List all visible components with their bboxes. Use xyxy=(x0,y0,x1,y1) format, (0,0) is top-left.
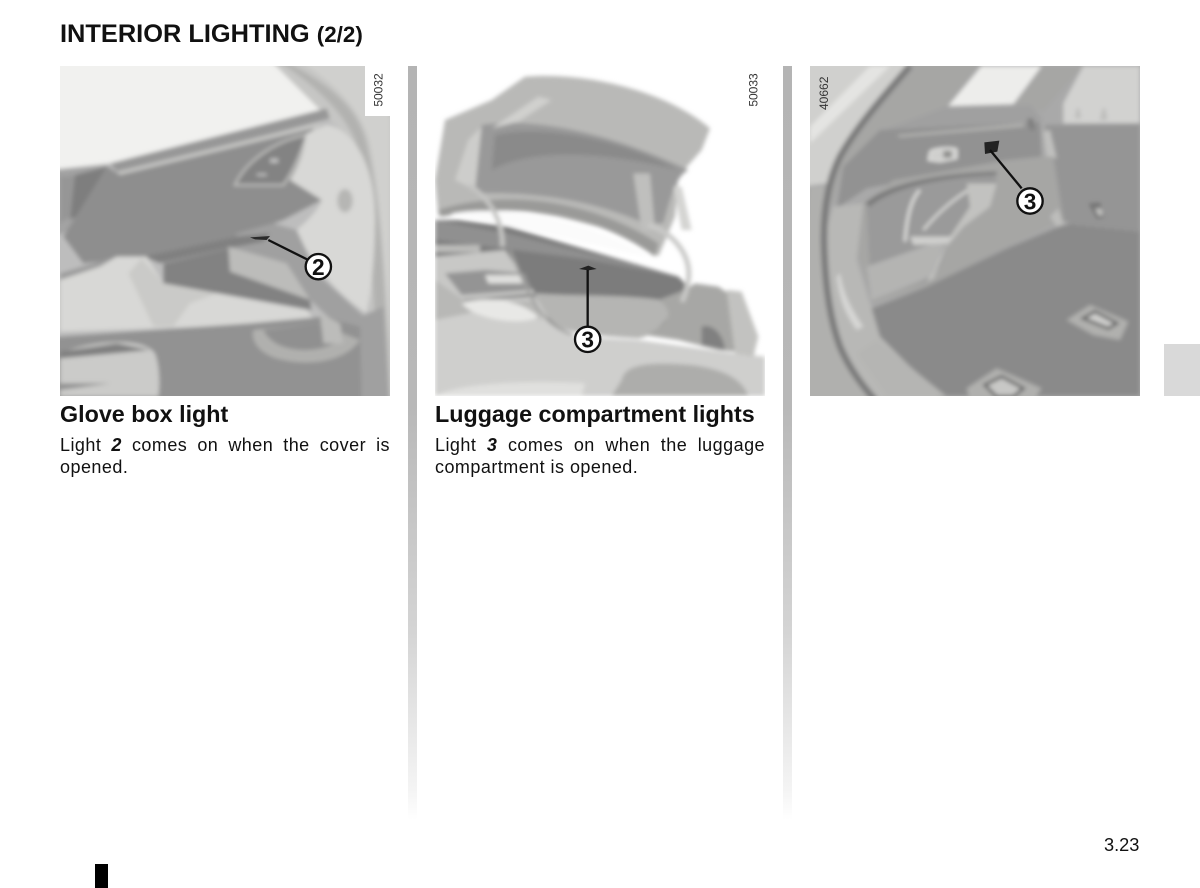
reference code 40662: 40662 xyxy=(817,76,831,110)
crop mark xyxy=(95,864,108,888)
illustration: glove box light xyxy=(60,66,390,396)
heading: luggage compartment lights: Luggage compartment lights xyxy=(435,401,755,427)
reference code 50032: 50032 xyxy=(372,73,386,107)
callout: light 2: 2 xyxy=(312,254,325,280)
callout: light 3: 3 xyxy=(581,327,594,353)
reference code 50033: 50033 xyxy=(747,73,761,107)
text: luggage compartment lights: Light 3 comes on when the luggage compartment is opened. xyxy=(435,435,765,476)
illustration: saloon boot xyxy=(435,73,765,396)
column separator 1 xyxy=(408,66,417,820)
callout: light 3: 3 xyxy=(1024,188,1036,214)
column separator 2 xyxy=(783,66,792,820)
illustration: estate boot xyxy=(810,66,1140,396)
callout: light 2 xyxy=(268,240,331,280)
callout: light 3 xyxy=(575,270,600,353)
title: INTERIOR LIGHTING (2/2) xyxy=(60,20,363,48)
page number: 3.23 xyxy=(1104,835,1139,855)
section tab xyxy=(1164,344,1200,396)
text: glove box light: Light 2 comes on when the cover is opened. xyxy=(60,435,390,476)
heading: glove box light: Glove box light xyxy=(60,401,228,427)
callout: light 3 xyxy=(990,150,1043,214)
